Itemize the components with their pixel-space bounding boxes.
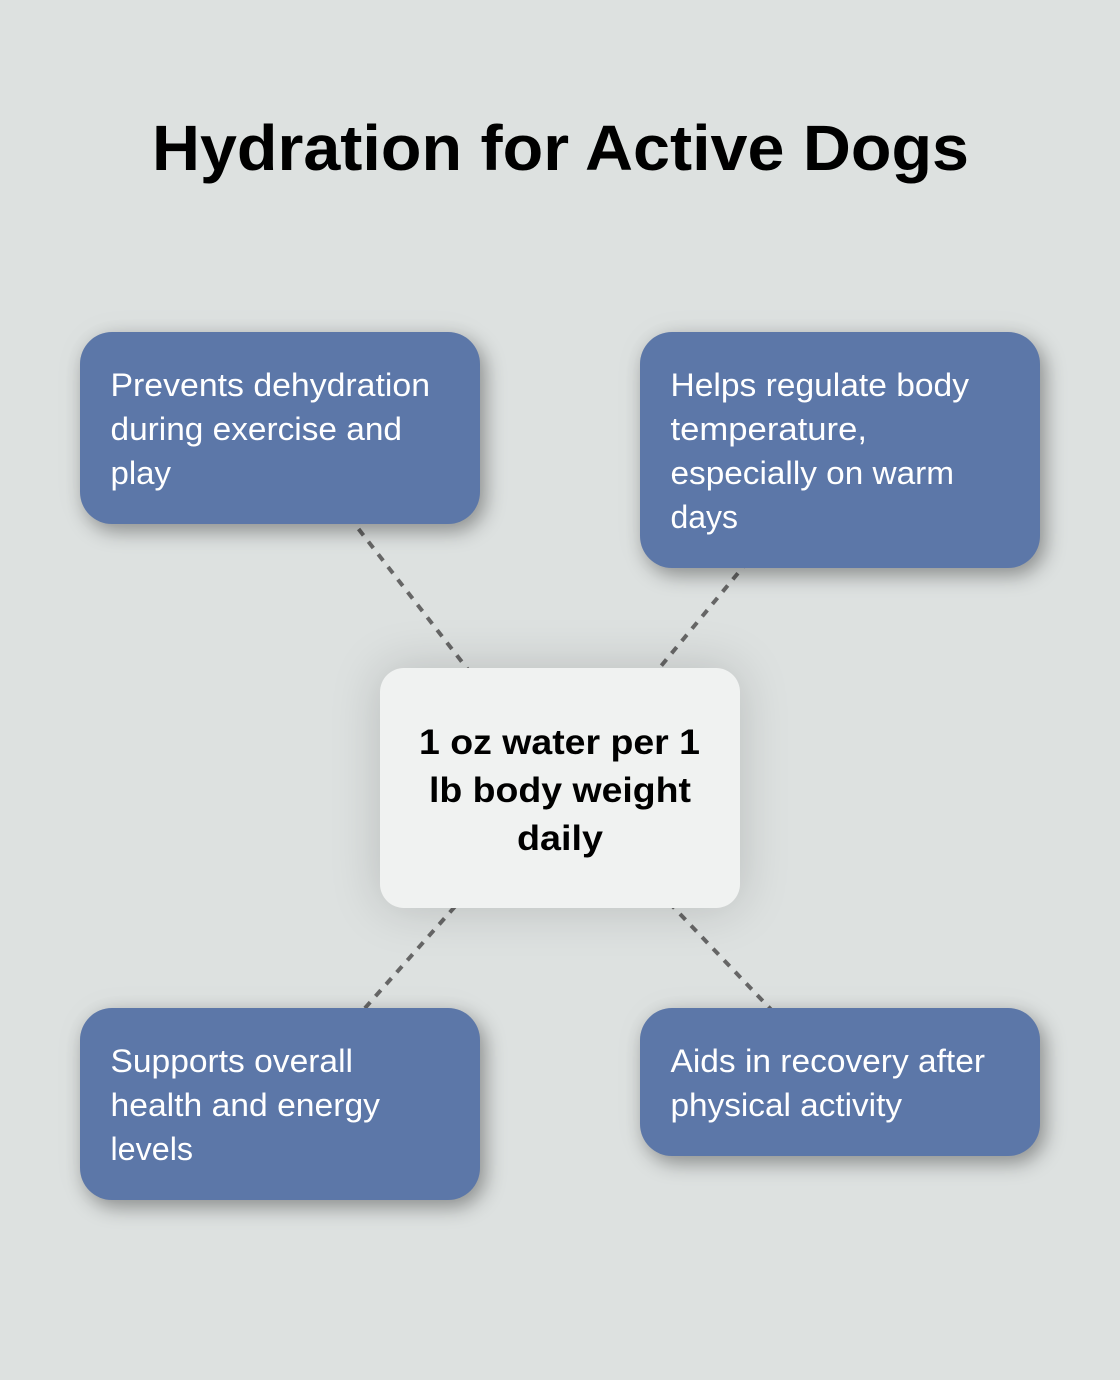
panel: recovery: physical activity bbox=[670, 1087, 902, 1123]
panel: prevents dehydration bbox=[80, 332, 480, 524]
connector: bottom-right card to centre bbox=[560, 788, 840, 1082]
panel: regulates temperature: especially on warm bbox=[670, 455, 954, 491]
panel: overall health: health and energy bbox=[110, 1087, 380, 1123]
title: Hydration for Active Dogs bbox=[152, 112, 969, 184]
panel: overall health: levels bbox=[110, 1131, 193, 1167]
panel: recovery bbox=[640, 1008, 1040, 1156]
panel: central guideline: 1 oz water per 1 bbox=[419, 723, 700, 762]
connector: top-left card to centre bbox=[280, 428, 560, 788]
panel: prevents dehydration: Prevents dehydration bbox=[110, 367, 430, 403]
connector: top-right card to centre bbox=[560, 450, 840, 788]
panel: overall health: Supports overall bbox=[110, 1043, 353, 1079]
panel: central guideline bbox=[380, 668, 740, 908]
panel: prevents dehydration: during exercise and bbox=[110, 411, 402, 447]
panel: prevents dehydration: play bbox=[110, 455, 171, 491]
panel: overall health bbox=[80, 1008, 480, 1200]
panel: regulates temperature: days bbox=[670, 499, 738, 535]
panel: central guideline: lb body weight bbox=[429, 771, 691, 810]
panel: central guideline: daily bbox=[517, 819, 604, 858]
panel: regulates temperature: Helps regulate body bbox=[670, 367, 969, 403]
panel: recovery: Aids in recovery after bbox=[670, 1043, 985, 1079]
panel: regulates temperature bbox=[640, 332, 1040, 568]
connector: bottom-left card to centre bbox=[280, 788, 560, 1104]
panel: regulates temperature: temperature, bbox=[670, 411, 867, 447]
